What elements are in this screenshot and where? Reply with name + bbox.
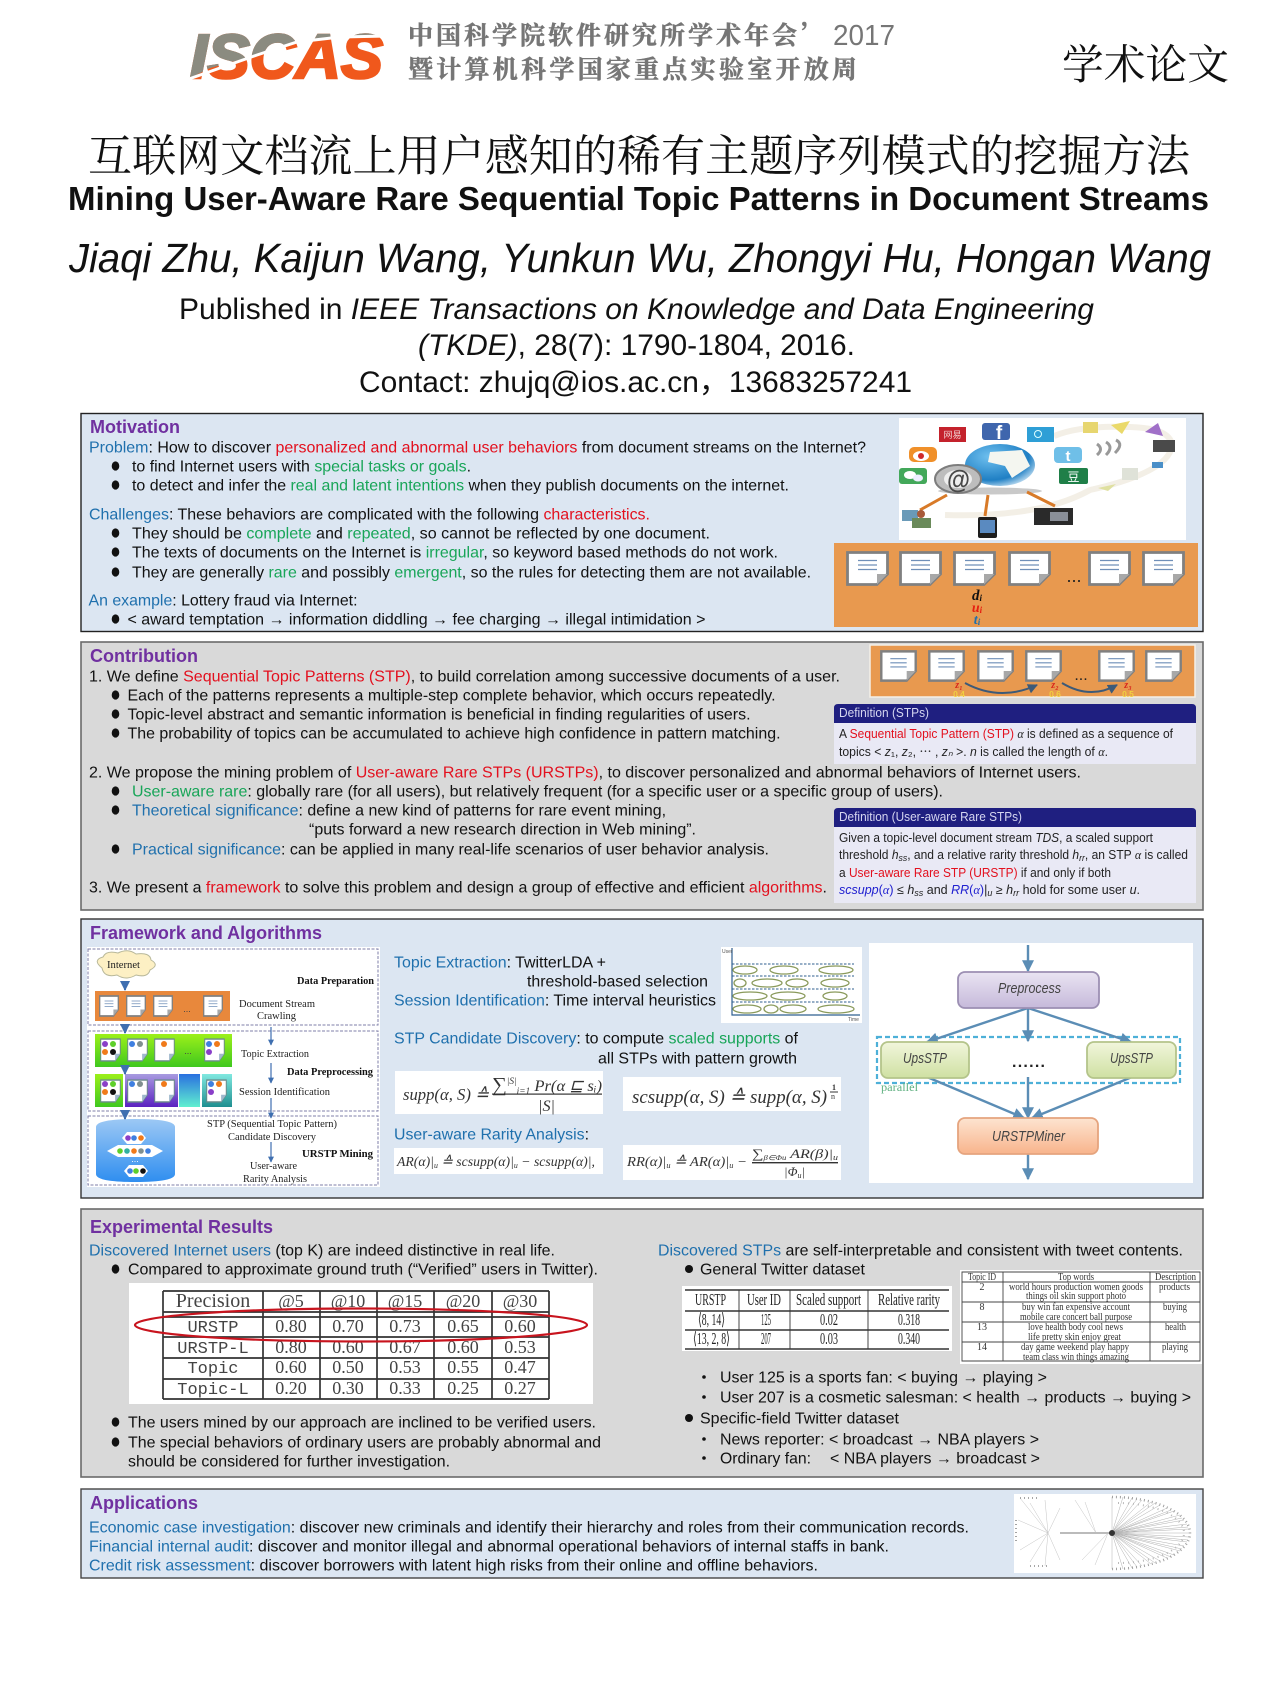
definition box: user-aware rare STPs: u: [987, 888, 992, 898]
formula: absolute rarity: u: [514, 1161, 518, 1170]
table: discovered URSTPs: ⟨8, 14⟩: [698, 1310, 725, 1329]
table: precision results: 0.47: [504, 1357, 536, 1377]
image: topic pattern over document stream: z₂: [1050, 680, 1059, 691]
image: social media illustration: [899, 418, 1186, 540]
bullet: news reporter: News reporter: < broadcast → NBA players >: [720, 1432, 1039, 1448]
table: precision results: 0.33: [389, 1378, 421, 1398]
table: precision results: 0.55: [447, 1357, 479, 1377]
labels: pipeline steps: Data Preparation: [297, 976, 374, 987]
panel: experimental results: [81, 1209, 1203, 1477]
table: discovered URSTPs: 207: [761, 1329, 771, 1348]
definition box: user-aware rare STPs: ss: [914, 888, 924, 898]
authors: Jiaqi Zhu, Kaijun Wang, Yunkun Wu, Zhongyi Hu, Hongan Wang: [68, 235, 1211, 281]
labels: pipeline steps: Rarity Analysis: [243, 1173, 307, 1185]
formula: support: |S|: [538, 1098, 555, 1115]
text: example: An example: Lottery fraud via Internet:: [88, 592, 358, 610]
definition box: user-aware rare STPs: scsupp(α) ≤ h: [839, 883, 914, 897]
arrows: pipeline flow: [125, 981, 271, 1162]
node: URSTPMiner: [958, 1118, 1098, 1154]
header: conference name: 2017: [833, 20, 895, 52]
image: topic pattern over document stream: 0.4: [953, 689, 965, 699]
bullet: example sequence: < award temptation → information diddling → fee charging → illegal intimidation >: [128, 612, 706, 628]
image: document stream orange strip: u: [972, 601, 980, 616]
table: precision results: 0.20: [275, 1378, 307, 1398]
labels: pipeline steps: Document Stream: [239, 998, 315, 1010]
table: precision results: Topic: [187, 1360, 239, 1379]
table: precision results: 0.30: [332, 1378, 364, 1398]
bullet: ordinary users: should be considered for further investigation.: [128, 1454, 450, 1470]
publication and contact: Published in IEEE Transactions on Knowledge and Data Engineering: [179, 293, 1095, 326]
node: UpsSTP left: UpsSTP: [903, 1051, 947, 1067]
image: topic pattern over document stream: z₁: [954, 680, 963, 691]
bullet: theoretical significance: [112, 802, 696, 838]
definition box: user-aware rare STPs: Definition (User-aware Rare STPs): [839, 809, 1022, 824]
header: conference name: 暨计算机科学国家重点实验室开放周: [408, 50, 857, 86]
table: precision results: 0.53: [389, 1357, 421, 1377]
node: preprocess: Preprocess: [998, 981, 1061, 997]
image: document stream orange strip: i: [978, 617, 981, 627]
table: precision results: Topic-L: [177, 1381, 249, 1400]
table: topic words: mobile care concert ball purpose: [1020, 1312, 1132, 1323]
bullet: irregular: The texts of documents on the Internet is irregular, so keyword based methods do not work.: [132, 544, 778, 562]
table: precision results: URSTP-L: [177, 1340, 249, 1359]
labels: pipeline steps: Candidate Discovery: [228, 1131, 316, 1143]
bullet: practical significance: Practical significance: can be applied in many real-life scenarios of user behavior analysis.: [132, 842, 769, 858]
definition box: user-aware rare STPs: , and a relative rarity threshold: [907, 848, 1072, 862]
table: discovered URSTPs: 0.03: [820, 1329, 838, 1348]
formula: absolute rarity: ≙ scsupp(α)|: [438, 1154, 514, 1170]
table: topic words: Top words: [1058, 1272, 1094, 1283]
callout: URSTP highlight ellipse: [135, 1308, 587, 1342]
formula: support: |S|: [507, 1076, 517, 1086]
node: UpsSTP right: UpsSTP: [1110, 1051, 1153, 1067]
formula: support: [395, 1071, 603, 1115]
table: topic words: 2: [980, 1282, 984, 1293]
definition box: STPs: [834, 704, 1196, 764]
formula: relative rarity: ∑: [752, 1146, 761, 1161]
formula: support: Pr(α ⊑ sᵢ): [530, 1078, 602, 1095]
formula: relative rarity: AR(β)|: [786, 1146, 833, 1161]
definition box: STPs: topics < z₁, z₂, ⋯ , zₙ >. n is called the length of α.: [839, 745, 1108, 759]
table: topic words: day game weekend play happy: [1021, 1342, 1129, 1353]
step icons: document stream: [95, 991, 230, 1021]
bullet: ordinary fan: Ordinary fan:: [720, 1450, 811, 1468]
table: precision results: 0.60: [504, 1316, 536, 1336]
icon: internet cloud: [97, 951, 155, 978]
table: discovered URSTPs: Relative rarity: [878, 1290, 940, 1309]
text: point 1: 1. We define Sequential Topic Patterns (STP), to build correlation among successive documents of a user.: [89, 668, 840, 686]
table: discovered URSTPs: 0.340: [898, 1329, 920, 1348]
labels: pipeline steps: User-aware: [250, 1160, 297, 1172]
definition box: user-aware rare STPs: ss: [899, 853, 908, 863]
definition box: user-aware rare STPs: hold for some user: [1019, 883, 1130, 897]
table: discovered URSTPs: User ID: [747, 1290, 781, 1309]
table: topic words: playing: [1162, 1342, 1188, 1353]
formula: support: supp(α, S) ≙: [403, 1085, 490, 1104]
diagram: parallel mining architecture: parallel: [881, 1082, 918, 1094]
text: topic extraction and session identification: Topic Extraction: TwitterLDA +: [394, 954, 606, 972]
panel: framework and algorithms: [81, 919, 1203, 1198]
publication and contact: (TKDE), 28(7): 1790-1804, 2016.: [418, 329, 855, 362]
formula: absolute rarity: [394, 1148, 603, 1174]
table: topic words: 13: [977, 1322, 987, 1333]
arrows: flow: [927, 945, 1132, 1179]
image: social media illustration: @: [947, 464, 970, 494]
table: topic words: things oil skin support photo: [1026, 1291, 1126, 1302]
bullet: ordinary fan: [702, 1450, 1040, 1468]
table: precision results: @5: [278, 1291, 304, 1311]
labels: pipeline steps: Crawling: [257, 1010, 296, 1022]
table: topic words: 8: [980, 1302, 984, 1313]
table: discovered URSTPs: [682, 1286, 952, 1351]
definition box: user-aware rare STPs: h: [1006, 883, 1013, 897]
bullet: probability: The probability of topics can be accumulated to achieve high confidence in pattern matching.: [128, 726, 780, 742]
table: precision results: 0.60: [275, 1357, 307, 1377]
bullet: general dataset: General Twitter dataset: [700, 1262, 866, 1278]
bullet: user 207: User 207 is a cosmetic salesman: < health → products → buying >: [720, 1390, 1191, 1406]
table: topic words: Topic ID: [968, 1272, 996, 1283]
publication and contact: Contact: zhujq@ios.ac.cn，13683257241: [359, 366, 912, 399]
text: problem: Problem: How to discover personalized and abnormal user behaviors from document streams on the Internet?: [89, 440, 866, 456]
bullet: ordinary users: [112, 1434, 601, 1470]
image: document stream orange strip: ...: [1066, 566, 1082, 586]
panel: contribution: [81, 642, 1203, 910]
text: topic extraction and session identification: threshold-based selection: [527, 974, 708, 990]
formula: relative rarity: u: [833, 1153, 838, 1162]
text: financial internal audit: Financial internal audit: discover and monitor illegal and abnormal operational behaviors of internal staffs in bank.: [89, 1538, 889, 1556]
definition box: user-aware rare STPs: threshold h: [839, 848, 899, 862]
image: social media illustration: 豆: [1067, 468, 1080, 485]
bullet: topic-level: Topic-level abstract and semantic information is beneficial in finding regularities of users.: [128, 706, 750, 724]
definition box: user-aware rare STPs: , an STP: [1085, 848, 1135, 862]
header: ISCAS logo: ISCAS: [190, 23, 383, 92]
formula: relative rarity: [623, 1145, 841, 1180]
heading: motivation: Motivation: [90, 417, 180, 437]
formula: support: i=1: [517, 1086, 530, 1096]
definition box: user-aware rare STPs: rr: [1079, 853, 1086, 863]
icon: internet cloud: Internet: [107, 959, 140, 971]
text: STP candidate discovery: [394, 1030, 799, 1068]
bullet: user 125: User 125 is a sports fan: < buying → playing >: [720, 1370, 1047, 1386]
labels: pipeline steps: Session Identification: [239, 1086, 330, 1098]
image: communication network graph: [1014, 1494, 1196, 1573]
text: discovered STPs: Discovered STPs are self-interpretable and consistent with tweet contents.: [658, 1242, 1183, 1260]
node: URSTPMiner: URSTPMiner: [992, 1129, 1066, 1145]
bullet: verified users: The users mined by our approach are inclined to be verified users.: [128, 1414, 596, 1432]
bullet: find users: to find Internet users with special tasks or goals.: [132, 458, 471, 476]
formula: scaled support: scsupp(α, S) ≙ supp(α, S): [632, 1087, 827, 1108]
node: UpsSTP left: [881, 1042, 969, 1078]
step icons: topic extraction: [95, 1034, 232, 1067]
formula: relative rarity: |: [801, 1164, 805, 1179]
definition box: STPs: A Sequential Topic Pattern (STP) α is defined as a sequence of: [839, 727, 1173, 741]
publication and contact: [179, 293, 1095, 399]
table: precision results: [129, 1283, 593, 1404]
step icons: session identification: [95, 1074, 232, 1107]
image: social media illustration: t: [1066, 448, 1070, 465]
formula: scaled support: [623, 1077, 841, 1111]
formula: absolute rarity: u: [434, 1161, 438, 1170]
definition box: user-aware rare STPs: RR(α)|: [951, 883, 987, 897]
table: topic words: [960, 1270, 1202, 1364]
table: precision results: 0.60: [332, 1337, 364, 1357]
table: precision results: @15: [388, 1291, 422, 1311]
table: precision results: 0.80: [275, 1316, 307, 1336]
table: precision results: 0.60: [447, 1337, 479, 1357]
title: Chinese: 互联网文档流上用户感知的稀有主题序列模式的挖掘方法: [88, 120, 1191, 184]
bullet: specific-field dataset: Specific-field Twitter dataset: [700, 1410, 900, 1428]
table: discovered URSTPs: Scaled support: [796, 1290, 861, 1309]
table: topic words: 14: [977, 1342, 987, 1353]
bullet: ordinary users: The special behaviors of ordinary users are probably abnormal and: [128, 1434, 601, 1452]
labels: pipeline steps: STP (Sequential Topic Pattern): [207, 1118, 337, 1130]
text: user-aware rarity analysis: User-aware Rarity Analysis:: [394, 1126, 589, 1144]
table: topic words: buying: [1163, 1302, 1187, 1313]
image: social media illustration: f: [996, 423, 1003, 444]
formula: relative rarity: ≙ AR(α)|: [671, 1154, 729, 1170]
table: precision results: 0.67: [389, 1337, 421, 1357]
chart: user sessions over time: Time: [848, 1017, 859, 1023]
bullet: ground truth: Compared to approximate ground truth (“Verified” users in Twitter).: [128, 1262, 598, 1278]
icon: STP database cylinder: [96, 1119, 175, 1182]
header: conference name: [408, 16, 895, 86]
definition box: user-aware rare STPs: ≥: [992, 883, 1006, 897]
node: UpsSTP right: [1087, 1042, 1176, 1078]
table: discovered URSTPs: 0.02: [820, 1310, 838, 1329]
bullet: theoretical significance: Theoretical significance: define a new kind of patterns for rare event mining,: [132, 802, 666, 820]
text: economic case investigation: Economic case investigation: discover new criminals and identify their hierarchy and roles from their communication records.: [89, 1520, 969, 1536]
image: topic pattern over document stream: 0.6: [1049, 689, 1061, 699]
table: topic words: life pretty skin enjoy great: [1028, 1332, 1121, 1343]
formula: relative rarity: u: [797, 1171, 801, 1180]
image: topic pattern over document stream: [870, 645, 1195, 699]
formula: relative rarity: u: [729, 1161, 733, 1170]
image: document stream orange strip: d: [972, 588, 979, 604]
table: precision results: 0.80: [275, 1337, 307, 1357]
text: discovered users: Discovered Internet users (top K) are indeed distinctive in real life.: [89, 1242, 555, 1260]
header: ISCAS logo: [190, 33, 384, 80]
labels: pipeline steps: Topic Extraction: [241, 1048, 309, 1060]
header: category label: 学术论文: [1062, 31, 1229, 91]
definition box: STPs: Definition (STPs): [839, 705, 929, 720]
bullet: user-aware rare: User-aware rare: globally rare (for all users), but relatively frequent (for a specific user or a specific group of users).: [132, 784, 943, 800]
table: precision results: 0.25: [447, 1378, 479, 1398]
labels: pipeline steps: [207, 976, 374, 1185]
chart: user sessions over time: User: [722, 949, 733, 955]
bullet: ordinary fan: < NBA players → broadcast >: [830, 1450, 1040, 1468]
diagram: parallel mining architecture: ......: [1012, 1054, 1045, 1071]
table: topic words: Description: [1155, 1272, 1196, 1283]
table: discovered URSTPs: 0.318: [898, 1310, 920, 1329]
header: ISCAS logo: ISCAS: [190, 23, 383, 92]
formula: relative rarity: −: [733, 1155, 747, 1170]
diagram: parallel mining architecture: [869, 943, 1193, 1183]
title: English: Mining User-Aware Rare Sequential Topic Patterns in Document Streams: [68, 180, 1209, 217]
table: precision results: URSTP: [187, 1319, 239, 1338]
text: point 3: 3. We present a framework to solve this problem and design a group of effective and efficient algorithms.: [89, 880, 827, 896]
heading: framework and algorithms: Framework and Algorithms: [90, 923, 322, 943]
text: point 2: 2. We propose the mining problem of User-aware Rare STPs (URSTPs), to discover personalized and abnormal behaviors of Internet users.: [89, 764, 1081, 782]
formula: relative rarity: β∈Φu: [762, 1154, 787, 1162]
table: discovered URSTPs: URSTP: [695, 1290, 726, 1309]
definition box: user-aware rare STPs: a User-aware Rare STP (URSTP) if and only if both: [839, 866, 1111, 880]
text: topic extraction and session identification: Session Identification: Time interval heuristics: [394, 992, 716, 1010]
formula: absolute rarity: − scsupp(α)|,: [518, 1155, 595, 1170]
table: topic words: team class win things amazing: [1023, 1352, 1129, 1363]
table: precision results: @20: [446, 1291, 480, 1311]
icon: STP database cylinder: ...: [131, 1154, 139, 1164]
step icons: document stream: ...: [183, 1004, 191, 1014]
heading: contribution: Contribution: [90, 646, 198, 666]
image: document stream orange strip: [834, 543, 1198, 628]
panel: motivation: [81, 414, 1203, 632]
image: document stream orange strip: t: [974, 613, 978, 628]
definition box: user-aware rare STPs: rr: [1013, 888, 1020, 898]
step icons: topic extraction: ...: [184, 1046, 192, 1056]
text: STP candidate discovery: all STPs with pattern growth: [598, 1050, 797, 1068]
table: precision results: 0.53: [504, 1337, 536, 1357]
bullet: complete behavior: Each of the patterns represents a multiple-step complete behavior, which occurs repeatedly.: [128, 688, 776, 704]
image: topic pattern over document stream: ...: [1074, 667, 1088, 684]
table: topic words: buy win fan expensive account: [1022, 1302, 1130, 1313]
node: preprocess: [958, 972, 1099, 1008]
formula: relative rarity: u: [666, 1161, 671, 1170]
image: topic pattern over document stream: 0.5: [1122, 689, 1134, 699]
table: precision results: 0.27: [504, 1378, 536, 1398]
table: precision results: @30: [503, 1291, 537, 1311]
table: precision results: Precision: [176, 1290, 250, 1312]
diagram: processing pipeline: [87, 947, 380, 1187]
bullet: infer intentions: to detect and infer the real and latent intentions when they publish documents on the internet.: [132, 478, 789, 494]
image: document stream orange strip: i: [979, 593, 982, 603]
labels: pipeline steps: URSTP Mining: [302, 1149, 374, 1160]
formula: scaled support: n: [831, 1092, 835, 1101]
text: credit risk assessment: Credit risk assessment: discover borrowers with latent high risks from their online and offline behaviors.: [89, 1558, 818, 1574]
header: conference name: 中国科学院软件研究所学术年会’: [408, 16, 825, 52]
table: precision results: 0.65: [447, 1316, 479, 1336]
text: STP candidate discovery: STP Candidate Discovery: to compute scaled supports of: [394, 1030, 799, 1048]
definition box: user-aware rare STPs: α is called: [1135, 848, 1190, 862]
table: precision results: 0.73: [389, 1316, 421, 1336]
definition box: user-aware rare STPs: [834, 808, 1196, 903]
table: discovered URSTPs: 125: [761, 1310, 771, 1329]
chart: user sessions over time: [721, 947, 862, 1023]
heading: experimental results: Experimental Results: [90, 1217, 273, 1237]
panel: applications: [81, 1489, 1203, 1578]
table: discovered URSTPs: ⟨13, 2, 8⟩: [693, 1329, 730, 1348]
formula: scaled support: 1: [832, 1083, 836, 1092]
table: precision results: 0.50: [332, 1357, 364, 1377]
bullet: theoretical significance: “puts forward a new research direction in Web mining”.: [309, 822, 696, 838]
definition box: user-aware rare STPs: and: [923, 883, 951, 897]
definition box: user-aware rare STPs: u.: [1130, 883, 1140, 897]
bullet: rare and emergent: They are generally rare and possibly emergent, so the rules for detecting them are not available.: [132, 564, 811, 582]
formula: absolute rarity: AR(α)|: [397, 1155, 435, 1170]
formula: relative rarity: |Φ: [784, 1164, 797, 1179]
labels: pipeline steps: Data Preprocessing: [287, 1067, 374, 1078]
formula: support: ∑: [492, 1074, 507, 1096]
text: challenges: Challenges: These behaviors are complicated with the following characteristics.: [89, 506, 650, 524]
definition box: user-aware rare STPs: Given a topic-level document stream TDS, a scaled support: [839, 831, 1153, 845]
formula: relative rarity: RR(α)|: [627, 1155, 665, 1170]
table: topic words: products: [1159, 1282, 1190, 1293]
table: precision results: @10: [331, 1291, 365, 1311]
image: social media illustration: 网易: [943, 428, 962, 441]
definition box: user-aware rare STPs: h: [1072, 848, 1079, 862]
table: precision results: 0.70: [332, 1316, 364, 1336]
text: topic extraction and session identification: [394, 954, 716, 1010]
bullet: complete and repeated: They should be complete and repeated, so cannot be reflected by one document.: [132, 526, 710, 542]
image: topic pattern over document stream: z₃: [1123, 680, 1132, 691]
heading: applications: Applications: [90, 1493, 198, 1513]
image: document stream orange strip: i: [980, 605, 983, 615]
table: topic words: world hours production women goods: [1009, 1282, 1143, 1293]
table: topic words: health: [1165, 1322, 1186, 1333]
table: topic words: love health body cool news: [1028, 1322, 1123, 1333]
